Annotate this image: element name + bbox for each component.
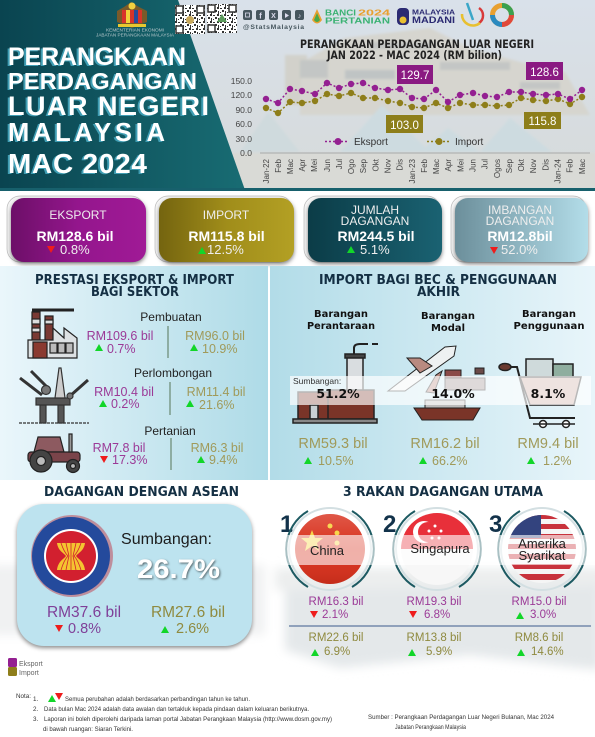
card: Import: RM115.8 bil xyxy=(188,228,265,244)
month labels: Mei xyxy=(456,159,465,172)
values: RM37.6 bil xyxy=(47,604,121,621)
contribution strip xyxy=(290,376,591,405)
logo: vision xyxy=(462,3,483,26)
row: Pembuatan: RM109.6 bil xyxy=(87,329,153,343)
category labels: Perantaraan xyxy=(307,321,375,332)
section: ASEAN trade: 26.7% xyxy=(137,554,220,584)
partner name strip: Singapura xyxy=(410,541,470,556)
social media icons: ♪ xyxy=(298,13,301,20)
y axis labels: 90.0 xyxy=(235,105,252,115)
heading: AKHIR xyxy=(417,285,460,300)
row: Pembuatan: 0.7% xyxy=(107,342,136,356)
heading: PRESTASI EKSPORT & IMPORT xyxy=(35,273,234,288)
colour legend xyxy=(8,658,43,677)
footer notes: 2. xyxy=(33,706,39,713)
section: ASEAN trade: RM27.6 bil xyxy=(151,604,225,621)
category labels: Barangan xyxy=(522,309,576,320)
ranks: 3 xyxy=(489,511,502,538)
logo: Banci Pertanian 2024: PERTANIAN xyxy=(325,16,390,26)
faded port photo background xyxy=(0,565,595,670)
y axis labels: 0.0 xyxy=(240,148,252,158)
bar under header xyxy=(0,188,595,191)
colour legend: Eksport xyxy=(19,661,43,668)
icon: factory xyxy=(28,310,77,358)
y axis labels: 60.0 xyxy=(235,119,252,129)
icon: industry plant xyxy=(293,344,378,423)
row: Perlombongan xyxy=(94,366,245,415)
value callouts: 103.0 xyxy=(390,120,419,132)
section: ASEAN trade: 2.6% xyxy=(176,621,209,637)
logo: Banci Pertanian 2024: BANCI xyxy=(325,8,356,18)
row: Pertanian xyxy=(93,424,243,470)
card: Imbangan Dagangan xyxy=(451,196,588,262)
row: Perlombongan: RM11.4 bil xyxy=(187,385,245,399)
title: MALAYSIA xyxy=(8,119,165,147)
y axis labels: 120.0 xyxy=(231,90,252,100)
footer notes: Nota: xyxy=(16,693,31,700)
social handle: @StatsMalaysia xyxy=(243,24,304,31)
export values xyxy=(309,596,566,621)
header photo background: building xyxy=(170,0,595,190)
card: Jumlah Dagangan: JUMLAH xyxy=(351,203,399,217)
category labels: Barangan xyxy=(314,309,368,320)
footer notes xyxy=(16,693,332,733)
logo: Banci Pertanian 2024: 2024 xyxy=(358,8,391,18)
category labels: Barangan xyxy=(421,311,475,322)
chart title: JAN 2022 - MAC 2024 (RM bilion) xyxy=(326,48,502,62)
logo: Malaysia Madani: MALAYSIA xyxy=(412,10,455,16)
month labels: Mac xyxy=(286,159,295,174)
ministry name: JABATAN PERANGKAAN MALAYSIA xyxy=(96,32,175,38)
month labels: Dis xyxy=(542,159,550,171)
footer notes: 3. xyxy=(33,716,39,723)
partner: Singapore xyxy=(393,508,481,590)
card: Jumlah Dagangan: RM244.5 bil xyxy=(337,228,415,244)
import values: RM22.6 bil xyxy=(309,632,363,644)
ranks xyxy=(280,511,502,538)
month labels: Feb xyxy=(420,158,429,173)
row: Perlombongan: 21.6% xyxy=(199,398,234,412)
footer notes: 1. xyxy=(33,696,39,703)
chart legend: Eksport xyxy=(354,137,388,148)
card: Imbangan Dagangan: RM12.8bil xyxy=(487,228,553,244)
month labels: Jun xyxy=(468,159,478,172)
month labels: Apr xyxy=(298,159,307,171)
category labels xyxy=(307,309,584,334)
row: Pertanian: 17.3% xyxy=(112,453,147,467)
panel: imports by BEC xyxy=(270,266,595,480)
month labels: Jul xyxy=(335,159,344,169)
section: ASEAN trade xyxy=(17,485,252,646)
logo: SDG wheel xyxy=(492,6,512,24)
card: Eksport: EKSPORT xyxy=(49,208,107,222)
card: Imbangan Dagangan: IMBANGAN xyxy=(488,203,552,217)
QR code 1 xyxy=(175,5,205,34)
card xyxy=(17,504,252,646)
month labels: Sep xyxy=(505,158,514,173)
import values: 5.9% xyxy=(426,646,452,658)
chart legend xyxy=(325,137,484,148)
icon: tractor xyxy=(28,434,80,472)
import values: 14.6% xyxy=(531,646,564,658)
month labels: Mei xyxy=(310,159,319,172)
card: Imbangan Dagangan: DAGANGAN xyxy=(486,214,554,228)
month labels: Apr xyxy=(444,159,453,171)
value callouts: 129.7 xyxy=(401,70,429,82)
row: Pertanian: Pertanian xyxy=(144,424,196,438)
title: LUAR NEGERI xyxy=(8,91,209,121)
month labels: Nov xyxy=(384,159,392,173)
ranks: 2 xyxy=(383,511,396,538)
month labels xyxy=(262,158,587,183)
card: Eksport: RM128.6 bil xyxy=(36,228,114,244)
row: Pembuatan: 10.9% xyxy=(202,342,237,356)
heading: BAGI SEKTOR xyxy=(91,285,179,300)
row: Perlombongan: 0.2% xyxy=(111,397,140,411)
title: PERDAGANGAN xyxy=(8,68,197,94)
chart title xyxy=(300,37,534,62)
ministry name xyxy=(96,28,175,38)
ranks: 1 xyxy=(280,511,293,538)
colour legend: Import xyxy=(19,670,39,677)
value callouts: 115.8 xyxy=(529,116,556,128)
title xyxy=(8,43,209,179)
value callouts: 128.6 xyxy=(530,67,559,79)
section: top 3 trading partners xyxy=(280,485,595,658)
heading: IMPORT BAGI BEC & PENGGUNAAN xyxy=(319,273,557,288)
import values: RM13.8 bil xyxy=(407,632,461,644)
month labels: Dis xyxy=(396,159,405,171)
month labels: Jan-23 xyxy=(408,158,417,183)
month labels: Jan-24 xyxy=(554,158,562,183)
contribution strip: 51.2% xyxy=(316,386,360,401)
ministry name: KEMENTERIAN EKONOMI xyxy=(106,28,164,32)
partner: USA xyxy=(498,508,586,590)
row: Pertanian: RM7.8 bil xyxy=(93,441,145,455)
logo: Malaysia Madani xyxy=(397,8,455,26)
partner name strip xyxy=(281,535,595,565)
export series xyxy=(263,80,585,106)
icon: national crest xyxy=(117,2,147,28)
row: Pembuatan xyxy=(87,310,245,358)
values: 1.2% xyxy=(543,454,572,468)
QR code 2 xyxy=(207,4,237,33)
category labels: Modal xyxy=(431,323,465,334)
month labels: Nov xyxy=(529,159,538,173)
contribution strip: 8.1% xyxy=(531,386,566,401)
chart title: PERANGKAAN PERDAGANGAN LUAR NEGERI xyxy=(300,37,534,51)
line chart: exports and imports xyxy=(231,62,590,183)
export values: RM19.3 bil xyxy=(407,596,461,608)
card: Jumlah Dagangan: DAGANGAN xyxy=(341,214,409,228)
y axis labels xyxy=(231,76,252,158)
values: RM9.4 bil xyxy=(517,436,579,452)
month labels: Jul xyxy=(481,159,490,169)
partner name strip: Amerika xyxy=(518,536,567,551)
source: Sumber : Perangkaan Perdagangan Luar Negeri Bulanan, Mac 2024 xyxy=(368,714,554,721)
card: Jumlah Dagangan xyxy=(304,196,442,262)
values: 66.2% xyxy=(432,454,467,468)
row: Perlombongan: Perlombongan xyxy=(134,366,212,380)
value callouts xyxy=(386,62,563,133)
contribution strip: Sumbangan: xyxy=(293,376,341,386)
icon: oil rig xyxy=(19,368,89,423)
source xyxy=(368,714,554,731)
values: RM59.3 bil xyxy=(298,436,368,452)
card: Import: 12.5% xyxy=(207,242,244,257)
export values: RM16.3 bil xyxy=(309,596,363,608)
social media icons: X xyxy=(271,13,276,20)
category labels: Penggunaan xyxy=(514,321,584,332)
heading xyxy=(35,273,234,300)
export values: 3.0% xyxy=(530,609,556,621)
title: PERANGKAAN xyxy=(8,43,186,71)
social media icons xyxy=(243,10,304,20)
card: Eksport: 0.8% xyxy=(60,242,90,257)
heading: 3 RAKAN DAGANGAN UTAMA xyxy=(343,485,543,500)
export values: 2.1% xyxy=(322,609,348,621)
section: ASEAN trade: 0.8% xyxy=(68,621,101,637)
heading xyxy=(319,273,557,300)
chart legend: Import xyxy=(455,137,484,148)
partner: China xyxy=(286,508,374,590)
partner name strip: Syarikat xyxy=(519,548,566,563)
import values xyxy=(309,632,564,658)
card: Import: IMPORT xyxy=(203,208,250,222)
icon: ASEAN emblem xyxy=(31,515,113,597)
logo: Banci Pertanian 2024 xyxy=(312,8,391,26)
month labels: Okt xyxy=(517,158,526,171)
contribution strip: 14.0% xyxy=(431,386,475,401)
y axis labels: 150.0 xyxy=(231,76,252,86)
month labels: Jan-22 xyxy=(262,158,271,183)
card: Jumlah Dagangan: 5.1% xyxy=(360,242,390,257)
footer notes: Laporan ini boleh diperolehi daripada laman portal Jabatan Perangkaan Malaysia (http://www.dosm.gov.my) xyxy=(44,716,332,723)
month labels: Mac xyxy=(432,159,441,174)
source: Jabatan Perangkaan Malaysia xyxy=(395,724,466,731)
row: Pertanian: RM6.3 bil xyxy=(191,441,243,455)
month labels: Ogo xyxy=(347,158,356,174)
contribution: Sumbangan: xyxy=(121,531,212,548)
values: 10.5% xyxy=(318,454,353,468)
heading: DAGANGAN DENGAN ASEAN xyxy=(44,485,239,500)
month labels: Mac xyxy=(578,159,587,174)
month labels: Feb xyxy=(274,158,283,173)
month labels: Feb xyxy=(566,158,575,173)
title: MAC 2024 xyxy=(8,148,147,179)
row: Pembuatan: RM96.0 bil xyxy=(185,329,245,343)
card: Import xyxy=(155,196,294,262)
month labels: Ogos xyxy=(493,159,502,178)
card: Eksport xyxy=(7,196,146,262)
card: Imbangan Dagangan: 52.0% xyxy=(501,242,538,257)
month labels: Sep xyxy=(359,158,368,173)
import series xyxy=(263,90,585,116)
month labels: Okt xyxy=(372,158,380,171)
import values: 6.9% xyxy=(324,646,350,658)
row: Pembuatan: Pembuatan xyxy=(140,310,202,324)
logo: Malaysia Madani: MADANI xyxy=(412,15,455,26)
panel: sector performance xyxy=(0,266,268,480)
icon: plane, train and ship xyxy=(388,346,485,420)
row: Pertanian: 9.4% xyxy=(209,453,238,467)
import values: RM8.6 bil xyxy=(515,632,563,644)
footer notes: Semua perubahan adalah berdasarkan perbandingan tahun ke tahun. xyxy=(65,696,250,703)
icon: shopping cart xyxy=(499,359,581,428)
footer notes: di bawah ruangan: Siaran Terkini. xyxy=(43,726,133,733)
header teal banner xyxy=(0,0,245,190)
export values: RM15.0 bil xyxy=(512,596,566,608)
footer notes: Data bulan Mac 2024 adalah data awalan dan tertakluk kepada pindaan dalam keluaran berikutnya. xyxy=(44,706,309,713)
export values: 6.8% xyxy=(424,609,450,621)
y axis labels: 30.0 xyxy=(235,134,252,144)
KPI strip xyxy=(7,196,588,262)
social media icons: f xyxy=(259,12,262,20)
month labels: Jun xyxy=(323,159,332,172)
values xyxy=(298,436,579,468)
partner name strip: China xyxy=(310,543,345,558)
row: Perlombongan: RM10.4 bil xyxy=(94,385,154,399)
values: RM16.2 bil xyxy=(410,436,480,452)
